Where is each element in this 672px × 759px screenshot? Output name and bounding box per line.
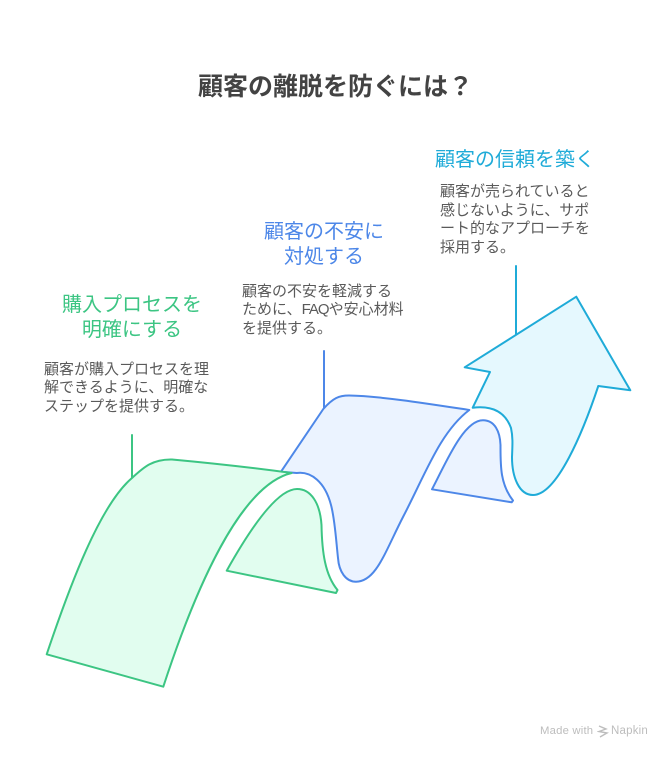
footer: brand: Napkin (611, 725, 648, 737)
text: step 2: を提供する。 (242, 320, 332, 336)
footer: made with Napkin: Made with (540, 725, 593, 737)
text: step 3: ート的なアプローチを (440, 220, 590, 237)
heading: step 3: 顧客の信頼を築く (435, 149, 595, 171)
band: step 2 small (432, 420, 513, 502)
band: step 1 main (47, 459, 292, 687)
text: step 3 (440, 183, 590, 256)
text: step 2: 顧客の不安を軽減する (242, 282, 392, 300)
band: step 2 main (281, 396, 469, 582)
band: step 2 (281, 351, 513, 582)
icon: napkin logo (597, 726, 609, 738)
heading: step 1 (62, 294, 202, 341)
band: step 1 (47, 435, 337, 687)
text: step 2 (242, 282, 404, 336)
heading: step 1: 明確にする (82, 319, 182, 341)
text: step 2: ために、FAQや安心材料 (242, 301, 404, 318)
text: step 1: 顧客が購入プロセスを理 (44, 360, 209, 378)
text: step 3: 感じないように、サポ (440, 202, 589, 218)
text: step 3: 顧客が売られていると (440, 183, 590, 200)
heading: step 2: 対処する (284, 246, 364, 268)
text: step 1: 解できるように、明確な (44, 379, 208, 396)
band: step 1 small (227, 489, 338, 593)
heading: step 2 (264, 221, 384, 268)
text: step 1 (44, 360, 209, 414)
heading: step 2: 顧客の不安に (264, 221, 384, 243)
title: 顧客の離脱を防ぐには？ (198, 73, 473, 101)
text: step 1: ステップを提供する。 (44, 398, 194, 414)
text: step 3: 採用する。 (440, 238, 515, 256)
heading: step 1: 購入プロセスを (62, 294, 202, 316)
arrow: step 3 (465, 266, 630, 495)
